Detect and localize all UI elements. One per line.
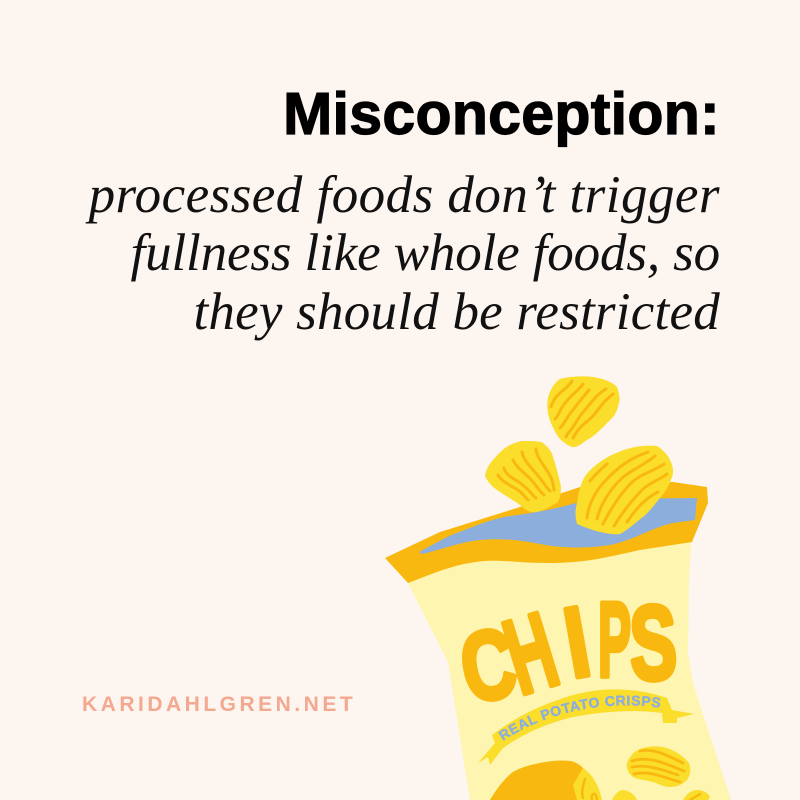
website credit: KARIDAHLGREN.NET (82, 693, 356, 716)
ribbon text: REAL POTATO CRISPS (498, 695, 660, 741)
bag opening (419, 498, 697, 554)
bag top band (385, 482, 708, 583)
chip: right (576, 446, 673, 534)
subtitle: misconception statement: they should be restricted (193, 282, 720, 340)
brand lettering: C (453, 608, 524, 724)
large chip on bag (490, 761, 602, 800)
brand lettering: P (598, 581, 631, 699)
subtitle: misconception statement: fullness like whole foods, so (130, 224, 720, 282)
title: Misconception: (283, 81, 720, 147)
subtitle: misconception statement (86, 166, 720, 340)
bag body (408, 525, 731, 800)
brand lettering (453, 581, 679, 724)
brand lettering: S (628, 584, 679, 704)
brand lettering: I (556, 586, 598, 700)
ribbon banner (478, 689, 694, 765)
chip: left (485, 441, 561, 512)
chip: top (547, 376, 620, 447)
small chip on bag (627, 746, 690, 787)
subtitle: misconception statement: processed foods don’t trigger (89, 166, 720, 224)
brand lettering: H (492, 591, 570, 717)
chips at bottom edge (612, 790, 710, 800)
